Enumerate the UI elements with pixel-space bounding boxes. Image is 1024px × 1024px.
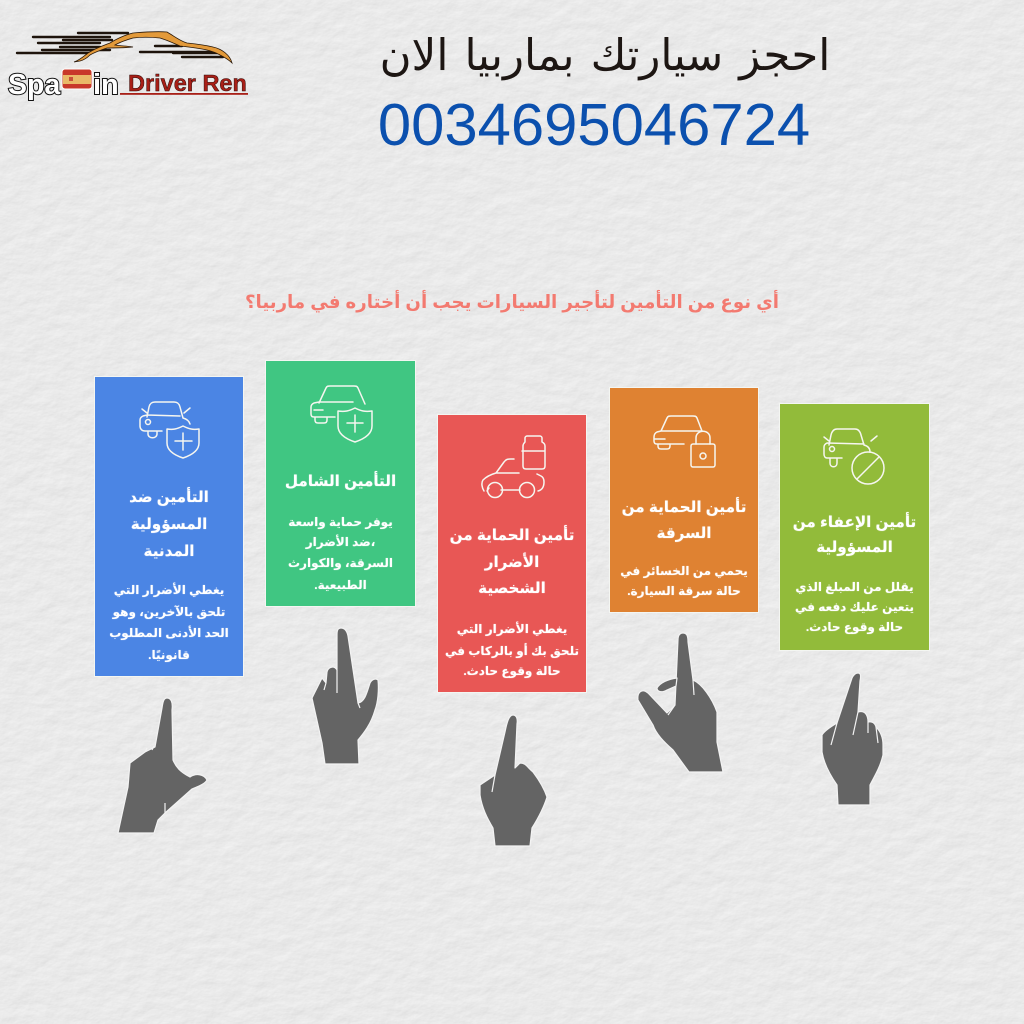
hand 4 xyxy=(638,633,723,772)
description lines: يوفر حماية واسعة xyxy=(288,515,393,529)
panel: comprehensive insurance: الطبيعية. xyxy=(314,578,367,592)
panel: civil liability insurance: الحد الأدنى المطلوب xyxy=(109,626,229,640)
question heading: أي نوع من التأمين لتأجير السيارات يجب أن أختاره في ماربيا؟ xyxy=(245,292,779,312)
logo underline xyxy=(120,93,248,95)
booking headline: احجز سيارتك بماربيا الان xyxy=(380,32,830,80)
hand 2 xyxy=(312,628,378,764)
panel: comprehensive insurance: ،ضد الأضرار xyxy=(306,535,375,549)
icon: car with padlock xyxy=(653,415,716,468)
description lines: يغطي الأضرار التي xyxy=(114,583,224,597)
phone number: 0034695046724 xyxy=(378,91,810,158)
logo wordmark Spa: Spa xyxy=(8,69,61,101)
title lines: تأمين الإعفاء من xyxy=(793,514,916,531)
icon: car with prohibition sign xyxy=(823,428,885,485)
title lines: التأمين ضد xyxy=(129,489,209,506)
panel: personal injury protection: تلحق بك أو بالركاب في xyxy=(445,644,579,658)
icon: car with shield plus xyxy=(310,385,373,443)
logo Spanish flag xyxy=(62,69,92,89)
icon: car with shield plus xyxy=(139,401,200,459)
description lines: يغطي الأضرار التي xyxy=(457,622,567,636)
title lines: تأمين الحماية من xyxy=(450,527,574,544)
panel: civil liability insurance: المدنية xyxy=(144,543,194,560)
panel: personal injury protection: الشخصية xyxy=(478,580,546,597)
panel: civil liability insurance: قانونيًا. xyxy=(148,648,190,662)
panel: theft protection xyxy=(609,387,759,613)
title lines: تأمين الحماية من xyxy=(622,499,746,516)
logo car silhouette xyxy=(74,32,232,63)
hand 5 xyxy=(822,673,883,805)
panel: civil liability insurance: تلحق بالآخرين، وهو xyxy=(113,605,225,619)
panel: personal injury protection xyxy=(437,414,587,693)
panel: civil liability insurance xyxy=(94,376,244,677)
panel: personal injury protection: الأضرار xyxy=(485,554,539,571)
logo wordmark Driver Ren: Driver Ren xyxy=(128,70,247,96)
panel: civil liability insurance: المسؤولية xyxy=(131,516,207,533)
description lines: يقلل من المبلغ الذي xyxy=(795,580,914,594)
panel: theft protection: السرقة xyxy=(657,525,711,542)
icon: car with bottle xyxy=(481,435,546,498)
logo speed streaks xyxy=(17,33,223,57)
panel: comprehensive insurance xyxy=(265,360,416,607)
hand 3 xyxy=(480,715,547,846)
panel: liability waiver: حالة وقوع حادث. xyxy=(806,620,903,634)
hand 1 xyxy=(118,698,207,833)
logo wordmark in: in xyxy=(93,69,119,101)
description lines: يحمي من الخسائر في xyxy=(620,564,748,578)
panel: liability waiver: يتعين عليك دفعه في xyxy=(795,600,914,614)
panel: comprehensive insurance: السرقة، والكوارث xyxy=(288,556,393,570)
title line: التأمين الشامل xyxy=(285,473,396,490)
panel: liability waiver xyxy=(779,403,930,651)
logo: Spain Driver Rent xyxy=(8,31,248,101)
panel: liability waiver: المسؤولية xyxy=(816,539,893,556)
panel: personal injury protection: حالة وقوع حادث. xyxy=(463,664,561,678)
panel: theft protection: حالة سرقة السيارة. xyxy=(627,584,741,598)
